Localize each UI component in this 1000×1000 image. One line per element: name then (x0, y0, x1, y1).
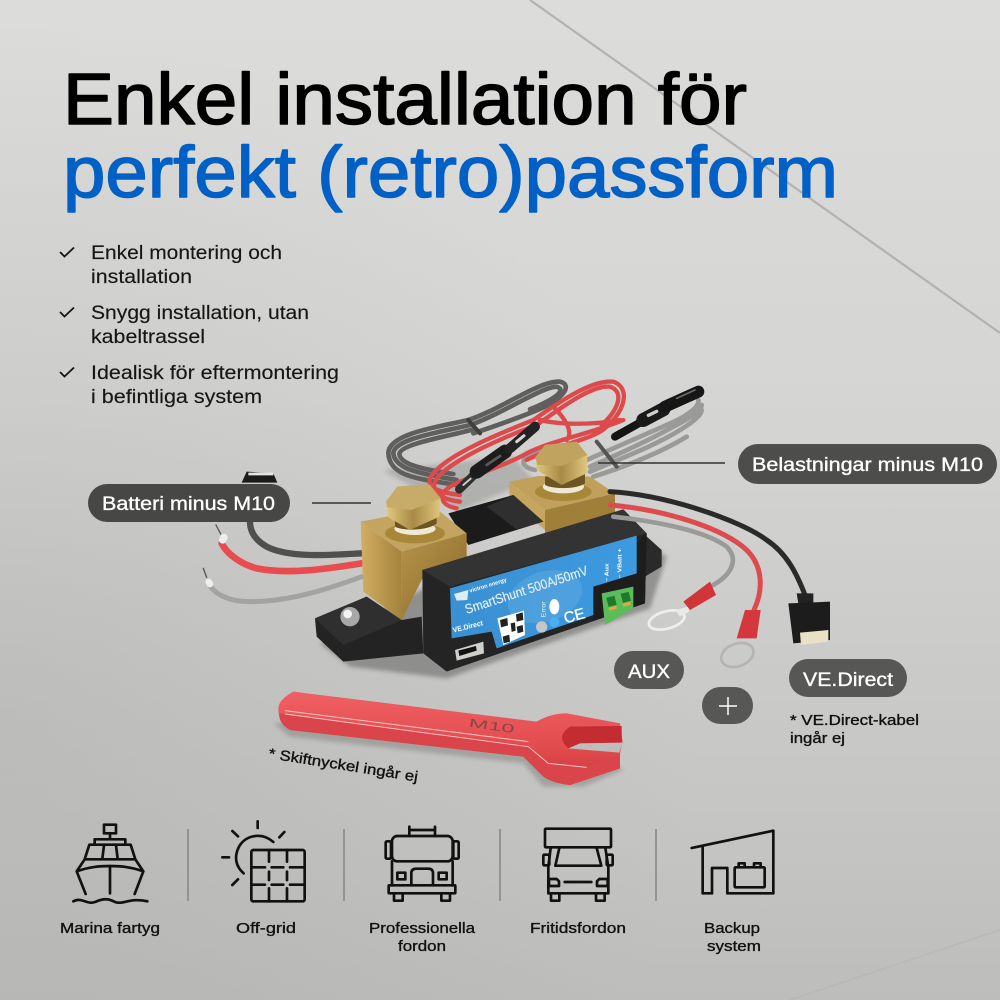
label: plus (702, 687, 753, 724)
bullet: tidy installation: kabeltrassel (91, 326, 205, 348)
bullet: tidy installation (60, 302, 309, 348)
label: VE.Direct (789, 659, 907, 697)
upper grey cable loop (388, 382, 566, 485)
callout: battery minus: Batteri minus M10 (102, 494, 275, 515)
rear bolt (535, 442, 592, 501)
main unit traced at 3x (315, 382, 702, 678)
shunt bar (448, 495, 543, 545)
bullet: simple mounting: installation (91, 266, 192, 288)
bullet: retrofit: i befintliga system (91, 386, 262, 408)
label: VE.Direct: VE.Direct (803, 670, 894, 691)
checklist (60, 242, 339, 408)
label: professional vehicles: Professionella (369, 920, 476, 937)
shunt housing (422, 509, 647, 672)
blue label: SmartShunt 500A/50mV (463, 563, 590, 617)
VE.Direct connector (788, 593, 830, 645)
callout: battery minus (88, 484, 371, 522)
wrench size mark: M10 (468, 716, 516, 736)
bullet: retrofit: Idealisk för eftermontering (91, 362, 339, 384)
VE.Direct port (455, 642, 484, 661)
product: SmartShunt with cables (203, 382, 830, 678)
label: professional vehicles (369, 920, 476, 955)
mounting foot left (315, 597, 423, 662)
callout: load minus: Belastningar minus M10 (752, 455, 983, 476)
blue label: – Aux (604, 562, 610, 582)
wrench (273, 692, 623, 787)
label: marine: Marina fartyg (60, 920, 160, 937)
right cables and terminals traced at 3x (610, 492, 830, 671)
bullet: tidy installation: Snygg installation, utan (91, 302, 309, 324)
bullet: simple mounting: Enkel montering och (91, 242, 282, 264)
label: backup system: Backup (704, 920, 760, 937)
blue label: VE.Direct (452, 618, 484, 635)
rear brass block (509, 476, 615, 533)
right grey cable bundle (523, 400, 702, 477)
right fuse holder (615, 390, 698, 437)
left cables and wire ends (203, 472, 362, 602)
front brass block (361, 512, 467, 620)
note: VE.Direct cable not included: ingår ej (790, 731, 845, 747)
green terminal (602, 587, 633, 625)
label: AUX: AUX (628, 662, 670, 683)
icon: off-grid solar (222, 821, 305, 901)
blue label: – VBatt + (618, 547, 624, 578)
label: backup system (704, 920, 761, 955)
note: VE.Direct cable not included (790, 713, 919, 747)
bullet: retrofit (60, 362, 339, 408)
icon: recreational vehicle (543, 829, 613, 901)
contact shadows (320, 457, 667, 678)
blue label: CE (562, 605, 587, 627)
bullet: simple mounting (60, 242, 282, 288)
left fuse holder (459, 427, 535, 489)
note: wrench not included: * Skiftnyckel ingår ej (267, 746, 419, 786)
mounting foot right (645, 535, 662, 577)
note: VE.Direct cable not included: * VE.Direct-kabel (790, 713, 919, 729)
title: Enkel installation för (63, 60, 747, 140)
ring terminal AUX (647, 582, 716, 633)
callout: load minus (598, 444, 997, 484)
front bolt (385, 484, 445, 543)
red cable loop (430, 382, 624, 508)
label: AUX (614, 651, 684, 689)
title: perfekt (retro)passform (63, 133, 838, 213)
blue label: Error (540, 601, 547, 617)
label: off-grid: Off-grid (236, 920, 296, 937)
label: backup system: system (707, 938, 761, 955)
label: professional vehicles: fordon (398, 938, 446, 955)
blue label (450, 536, 637, 648)
right cables (610, 492, 805, 610)
label: recreational vehicles: Fritidsfordon (530, 920, 626, 937)
application icons row (60, 821, 773, 955)
ring terminal plus (718, 610, 761, 671)
icon: professional vehicle (386, 827, 459, 901)
QR code (497, 611, 525, 645)
icon: marine vessel (73, 825, 147, 903)
title (63, 60, 838, 213)
blue label: victron energy (469, 577, 508, 595)
icon: backup system (692, 831, 773, 893)
